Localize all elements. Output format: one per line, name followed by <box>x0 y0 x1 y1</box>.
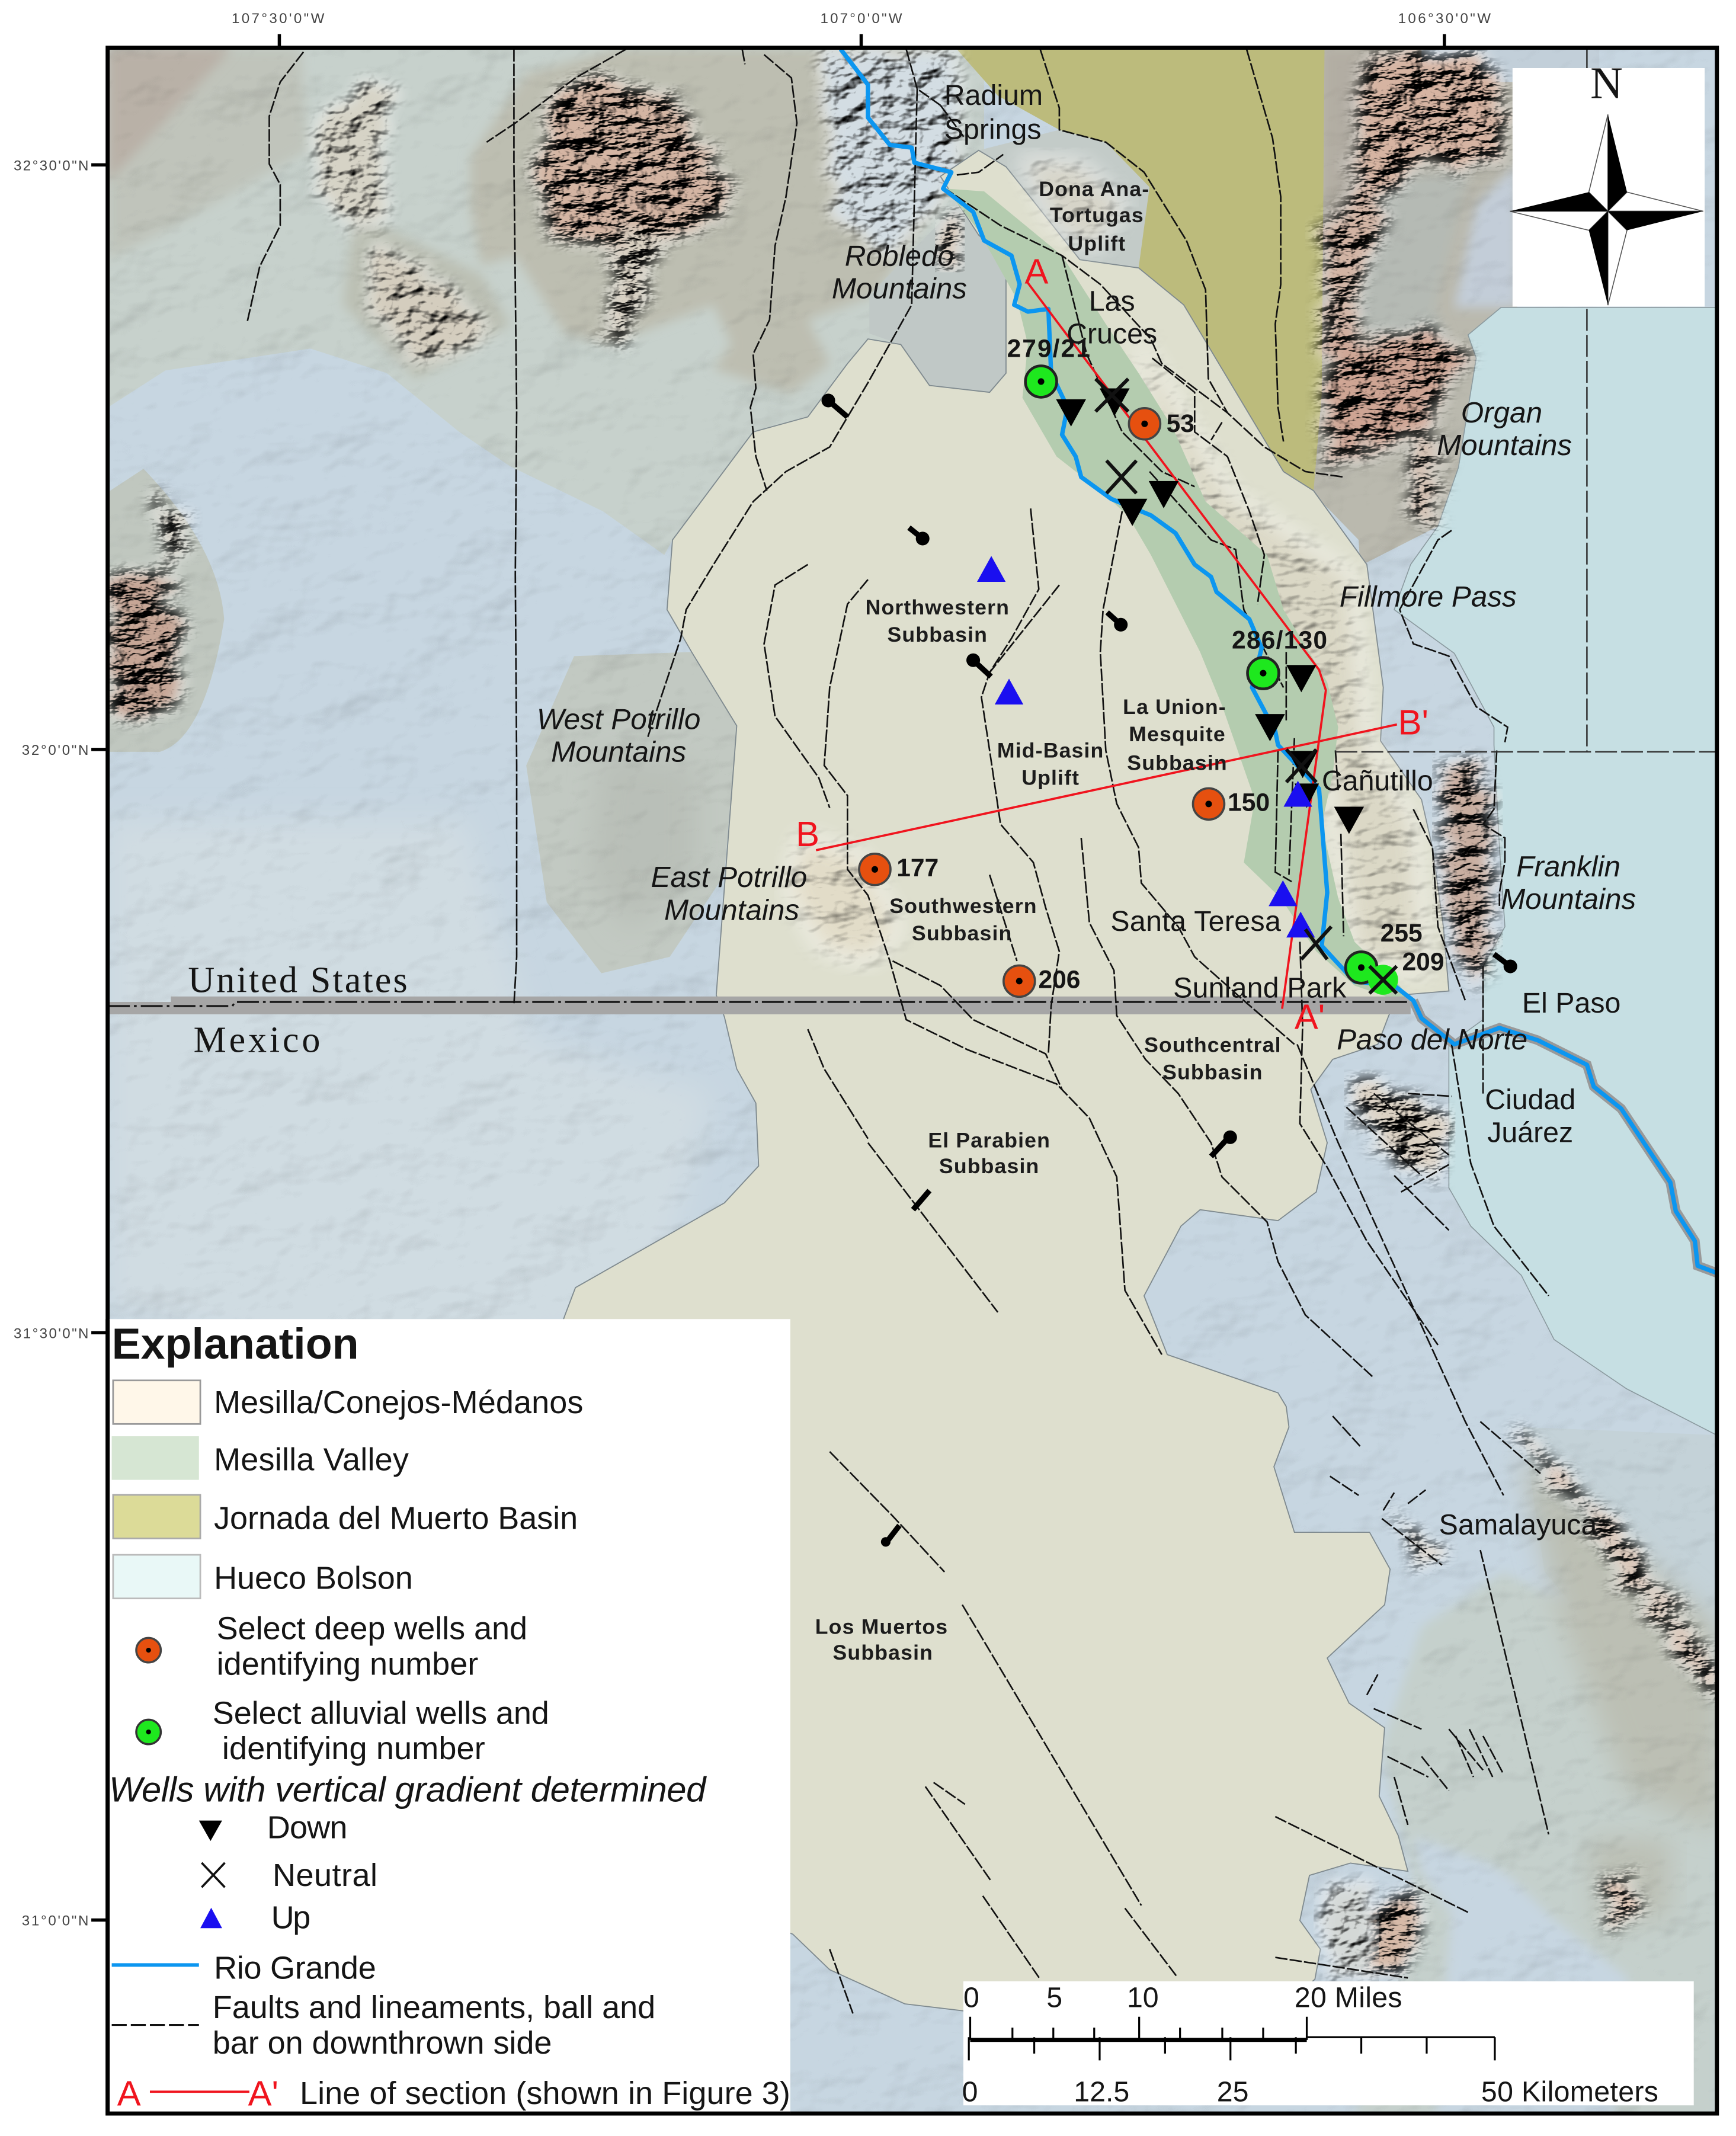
label: Southwestern Subbasin: Southwestern <box>889 894 1037 918</box>
line: faults <box>112 1990 655 2061</box>
line: Rio Grande: Rio Grande <box>214 1950 376 1986</box>
Organ Mountains <box>1323 55 1504 520</box>
international border band <box>108 997 1411 1014</box>
well numbers: 177 <box>896 854 939 882</box>
Mesilla Conejos-Medanos basin <box>410 150 1449 2050</box>
swatch: Hueco Bolson <box>113 1555 413 1599</box>
text: alluvial wells: identifying number <box>222 1731 485 1766</box>
ball and bar symbols <box>821 393 1517 1546</box>
text: deep wells: identifying number <box>217 1647 478 1682</box>
label: Southcentral Subbasin: Subbasin <box>1162 1060 1263 1084</box>
far-west mountains <box>108 499 194 718</box>
alluvial wells <box>1026 366 1398 995</box>
graticule ticks and labels: 31°0'0"N <box>22 1913 88 1929</box>
label: West Potrillo Mountains: West Potrillo <box>537 703 700 735</box>
legend subheading: Wells with vertical gradient determined <box>109 1769 707 1809</box>
text: deep wells <box>217 1611 527 1682</box>
Jornada del Muerto Basin area <box>957 49 1324 506</box>
Hueco Bolson area <box>1394 308 1722 1438</box>
label: East Potrillo Mountains: East Potrillo <box>651 861 807 894</box>
icon: down: Down <box>267 1810 347 1845</box>
line of section: A <box>117 2073 141 2113</box>
text: alluvial wells: Select alluvial wells and <box>213 1695 549 1731</box>
label: Samalayuca: Samalayuca <box>1439 1509 1597 1541</box>
scale bar: 20 Miles <box>1295 1982 1402 2014</box>
East Potrillo flank <box>786 834 902 963</box>
label: Southcentral Subbasin: Southcentral <box>1144 1033 1282 1056</box>
label: La Union-Mesquite Subbasin: Mesquite <box>1129 722 1226 746</box>
label: Santa Teresa: Santa Teresa <box>1110 905 1281 937</box>
label: Sunland Park: Sunland Park <box>1173 972 1347 1004</box>
graticule ticks and labels: 107°0'0"W <box>821 11 902 27</box>
label: El Parabien Subbasin: Subbasin <box>939 1154 1039 1178</box>
label: Fillmore Pass: Fillmore Pass <box>1340 580 1517 613</box>
label: Northwestern Subbasin: Subbasin <box>888 623 988 646</box>
label: Ciudad Juarez: Juárez <box>1487 1116 1573 1148</box>
label: Radium Springs: Radium <box>944 79 1043 111</box>
graticule ticks and labels: 106°30'0"W <box>1398 11 1491 27</box>
scale bar: 25 <box>1217 2076 1248 2108</box>
label: East Potrillo Mountains: Mountains <box>664 894 799 926</box>
north arrow <box>1510 59 1705 306</box>
north arrow: N <box>1590 59 1623 108</box>
well numbers: 150 <box>1228 788 1270 816</box>
well numbers: 286/130 <box>1232 626 1327 655</box>
down gradient wells <box>1056 388 1364 834</box>
Dona Ana Uplift area <box>979 130 1149 268</box>
icon: deep well <box>136 1638 161 1663</box>
label: El Parabien Subbasin: El Parabien <box>928 1128 1050 1152</box>
label: Dona Ana-Tortugas Uplift: Uplift <box>1068 232 1126 255</box>
scale bar: 0 <box>963 1982 979 2014</box>
section labels: B <box>796 814 819 854</box>
swatch: Mesilla Valley: Mesilla Valley <box>214 1442 409 1478</box>
graticule ticks and labels: 32°30'0"N <box>14 158 88 174</box>
label: Mid-Basin Uplift: Uplift <box>1021 766 1080 790</box>
north-central mountains <box>536 75 733 342</box>
label: Northwestern Subbasin: Northwestern <box>866 595 1010 619</box>
well numbers <box>896 335 1444 994</box>
label: United States: United States <box>188 960 408 1000</box>
label: Robledo Mountains: Robledo <box>845 239 954 272</box>
label: Mid-Basin Uplift: Mid-Basin <box>997 739 1104 763</box>
label: Organ Mountains: Mountains <box>1437 429 1572 462</box>
well numbers: 255 <box>1381 919 1423 947</box>
label: Dona Ana-Tortugas Uplift: Tortugas <box>1050 203 1144 227</box>
scale bar: 5 <box>1046 1982 1062 2014</box>
label: Mexico: Mexico <box>194 1020 320 1060</box>
label: Southwestern Subbasin: Subbasin <box>912 921 1012 945</box>
icon: neutral <box>201 1858 377 1893</box>
map labels <box>188 79 1636 1664</box>
legend panel: Explanation <box>108 1319 790 2113</box>
up gradient wells <box>977 556 1315 937</box>
neutral gradient wells <box>1096 379 1397 994</box>
well numbers: 209 <box>1402 947 1444 976</box>
swatch: Mesilla Valley <box>112 1436 409 1480</box>
swatch: Jornada del Muerto Basin <box>113 1495 578 1539</box>
faults and lineaments <box>248 49 1549 2013</box>
Franklin Mountains <box>1438 758 1497 987</box>
scale bar: 0 <box>962 2076 978 2108</box>
graticule ticks and labels: 107°30'0"W <box>232 11 325 27</box>
western ridge hills <box>315 75 492 362</box>
section labels <box>796 251 1428 1036</box>
label: Franklin Mountains: Mountains <box>1501 883 1636 915</box>
line of section: A' <box>248 2073 278 2113</box>
Samalayuca ridges <box>1360 1435 1719 1975</box>
deep wells <box>859 408 1224 997</box>
Mesilla Valley <box>946 188 1413 1006</box>
label: La Union-Mesquite Subbasin: Subbasin <box>1127 751 1228 774</box>
line: faults: Faults and lineaments, ball and <box>213 1990 655 2025</box>
line of section: Line of section (shown in Figure 3) <box>300 2076 790 2111</box>
icon: neutral: Neutral <box>273 1858 377 1893</box>
label: El Paso: El Paso <box>1522 987 1620 1019</box>
scale bar: 12.5 <box>1074 2076 1129 2108</box>
Jornada lighter lobe <box>1139 268 1314 506</box>
icon: alluvial well <box>136 1719 161 1744</box>
label: Dona Ana-Tortugas Uplift: Dona Ana- <box>1039 177 1149 201</box>
Rio Grande border shadow <box>1413 1001 1719 1274</box>
label: Las Cruces: Las <box>1089 285 1135 317</box>
label: Paso del Norte: Paso del Norte <box>1337 1023 1527 1056</box>
label: Franklin Mountains: Franklin <box>1516 850 1620 883</box>
swatch: Jornada del Muerto Basin: Jornada del Muerto Basin <box>214 1500 578 1536</box>
graticule ticks and labels: 31°30'0"N <box>14 1325 88 1341</box>
scale bar: 50 Kilometers <box>1481 2076 1658 2108</box>
swatch: Hueco Bolson: Hueco Bolson <box>214 1561 413 1596</box>
label: La Union-Mesquite Subbasin: La Union- <box>1123 695 1226 719</box>
Dona Ana peaks <box>1018 157 1128 253</box>
label: Las Cruces: Cruces <box>1066 318 1157 350</box>
line of section <box>117 2073 790 2113</box>
label: Organ Mountains: Organ <box>1461 396 1542 429</box>
icon: up <box>200 1900 310 1935</box>
swatch: Mesilla/Conejos-Medanos <box>113 1381 583 1424</box>
well numbers: 279/21 <box>1007 335 1090 363</box>
scale bar <box>962 1981 1694 2108</box>
section labels: B' <box>1398 703 1428 742</box>
label: Robledo Mountains: Mountains <box>832 273 967 305</box>
scale bar: 10 <box>1127 1982 1159 2014</box>
Rio Grande <box>841 49 1719 1274</box>
icon: up: Up <box>271 1900 310 1935</box>
section lines A-A' and B-B' <box>816 283 1397 1009</box>
graticule ticks and labels <box>14 11 1491 1929</box>
Juarez mountains <box>1353 1080 1446 1183</box>
section labels: A' <box>1295 997 1325 1036</box>
label: Canutillo: Cañutillo <box>1322 765 1433 797</box>
lower-right block pale flank <box>1319 1881 1374 1978</box>
label: Los Muertos Subbasin: Los Muertos <box>815 1615 948 1639</box>
well numbers: 206 <box>1038 965 1080 994</box>
upper Rio Grande rough terrain <box>820 49 963 260</box>
text: deep wells: Select deep wells and <box>217 1611 527 1647</box>
label: Ciudad Juarez: Ciudad <box>1485 1084 1575 1116</box>
legend title: Explanation <box>112 1319 359 1368</box>
label: Los Muertos Subbasin: Subbasin <box>833 1641 933 1664</box>
state boundary lines <box>1335 49 1719 752</box>
swatch: Mesilla/Conejos-Medanos: Mesilla/Conejos-Médanos <box>214 1385 583 1420</box>
section labels: A <box>1024 251 1048 291</box>
Robledo Mountains block <box>869 205 1006 392</box>
label: West Potrillo Mountains: Mountains <box>551 736 686 768</box>
basin relief shading <box>1135 328 1428 977</box>
well numbers: 53 <box>1167 409 1194 438</box>
line: faults: bar on downthrown side <box>213 2025 552 2061</box>
Robledo peak <box>938 212 962 267</box>
icon: down <box>199 1810 347 1845</box>
graticule ticks and labels: 32°0'0"N <box>22 742 88 758</box>
text: alluvial wells <box>213 1695 549 1766</box>
label: Radium Springs: Springs <box>944 114 1042 146</box>
